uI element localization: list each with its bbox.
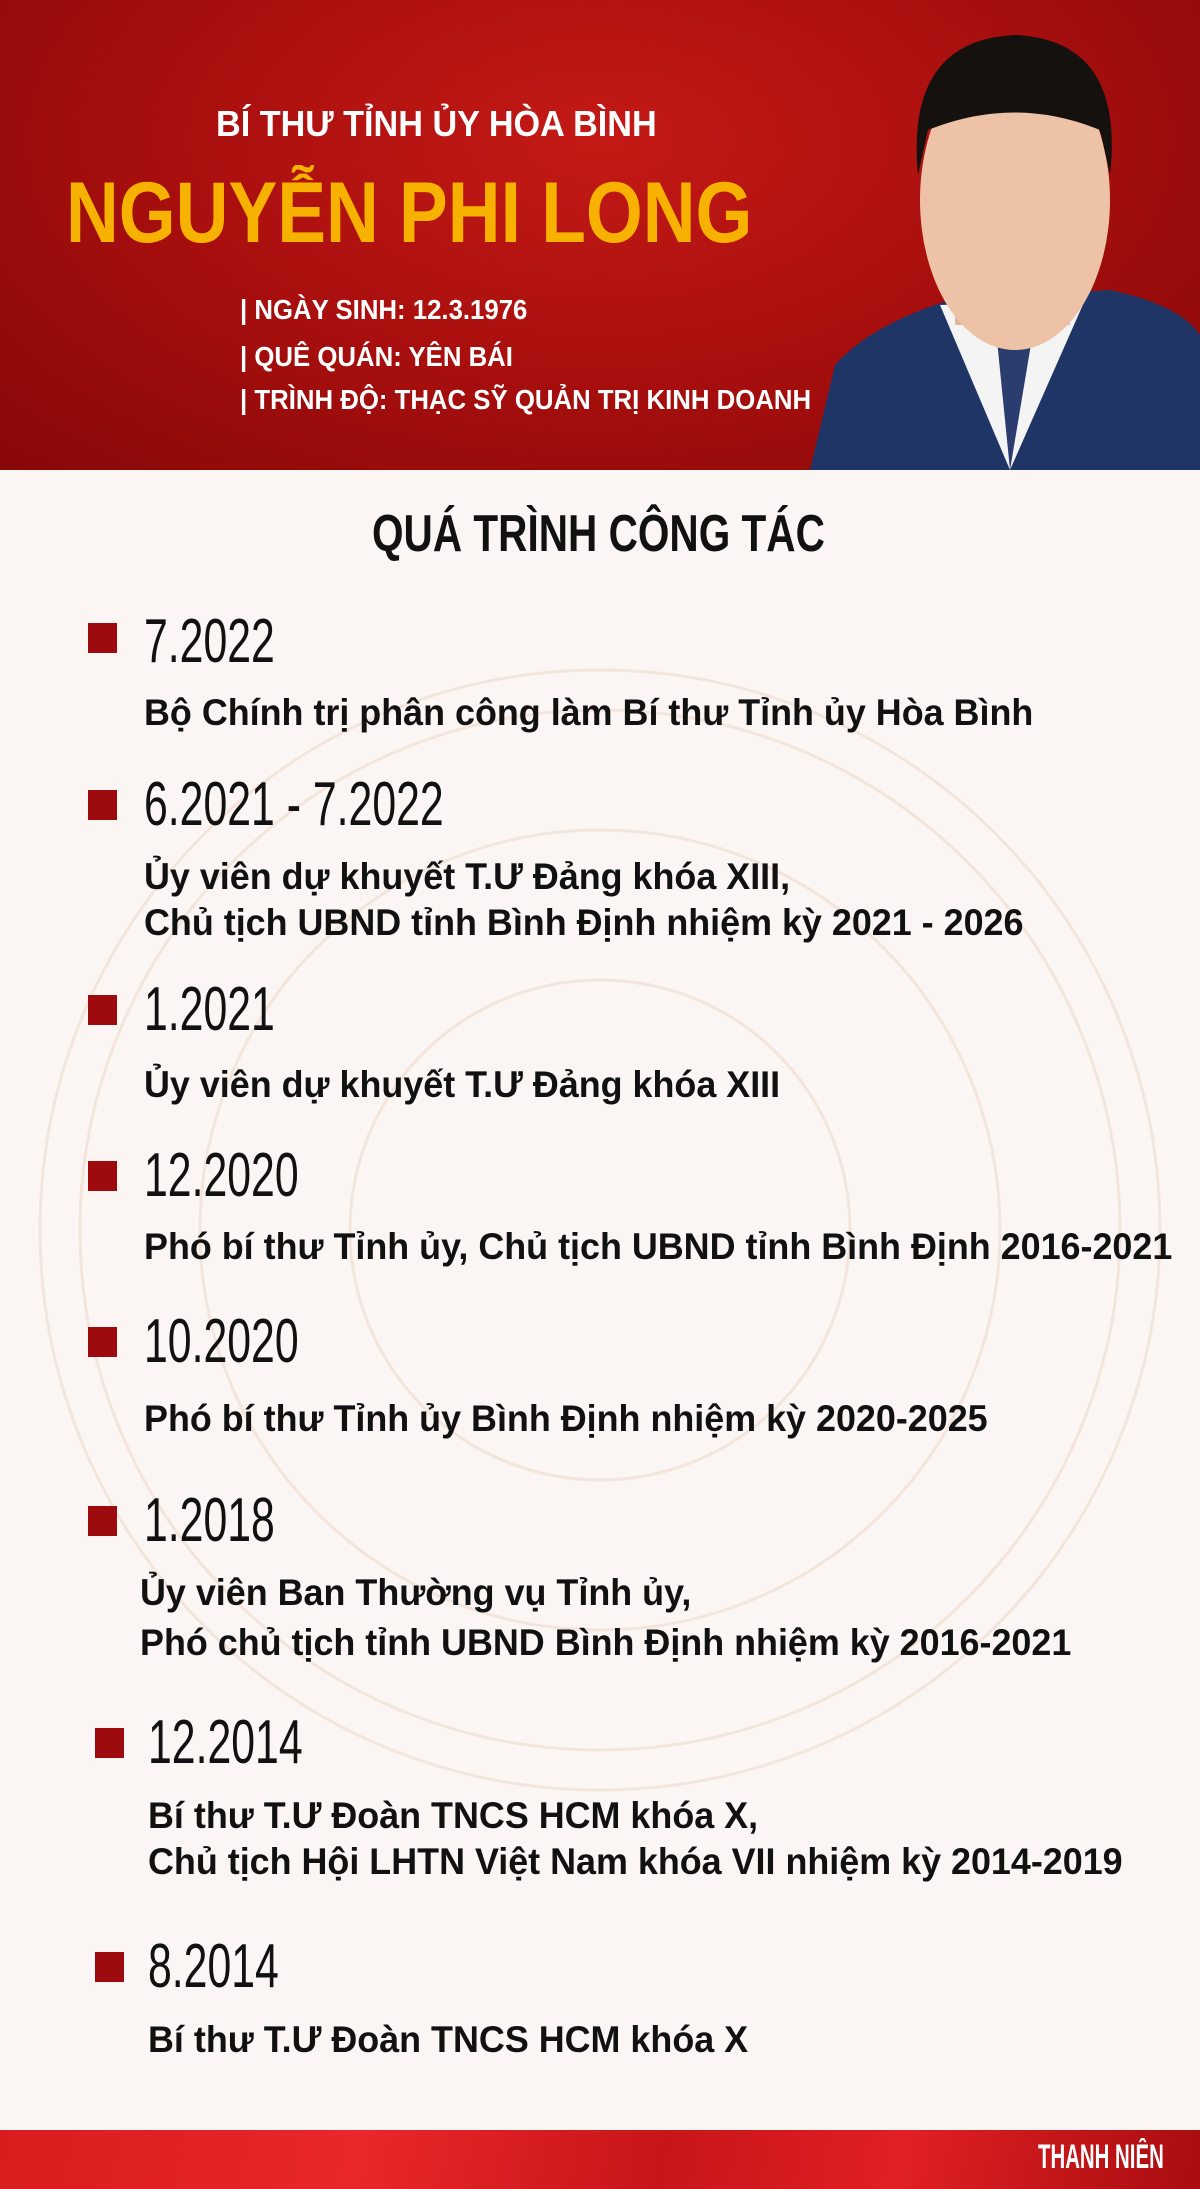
timeline item 8.2014 bbox=[95, 1932, 748, 2060]
timeline item 10.2020: Phó bí thư Tỉnh ủy Bình Định nhiệm kỳ 2020-2025 bbox=[144, 1398, 988, 1439]
timeline item 10.2020: 10.2020 bbox=[144, 1307, 299, 1376]
timeline item 12.2020: Phó bí thư Tỉnh ủy, Chủ tịch UBND tỉnh Bình Định 2016-2021 bbox=[144, 1226, 1172, 1267]
timeline item 1.2018 bbox=[88, 1486, 1071, 1663]
timeline item 8.2014: Bí thư T.Ư Đoàn TNCS HCM khóa X bbox=[148, 2019, 748, 2060]
info: hometown: | QUÊ QUÁN: YÊN BÁI bbox=[240, 341, 513, 372]
info: birth date: | NGÀY SINH: 12.3.1976 bbox=[240, 294, 527, 325]
name title: NGUYỄN PHI LONG bbox=[66, 165, 752, 261]
timeline item 6.2021 - 7.2022: Ủy viên dự khuyết T.Ư Đảng khóa XIII, bbox=[144, 856, 790, 897]
timeline item 1.2021: 1.2021 bbox=[144, 975, 275, 1044]
timeline item 12.2014 bbox=[95, 1708, 1123, 1882]
timeline item 6.2021 - 7.2022: Chủ tịch UBND tỉnh Bình Định nhiệm kỳ 2021 - 2026 bbox=[144, 902, 1023, 943]
footer band bbox=[0, 2130, 1200, 2189]
timeline item 12.2020 bbox=[88, 1141, 1172, 1267]
logo: THANH NIEN: THANH NIÊN bbox=[1038, 2138, 1164, 2176]
timeline item 8.2014: 8.2014 bbox=[148, 1932, 279, 2001]
timeline item 1.2018: Phó chủ tịch tỉnh UBND Bình Định nhiệm kỳ 2016-2021 bbox=[140, 1622, 1071, 1663]
timeline item 6.2021 - 7.2022: 6.2021 - 7.2022 bbox=[144, 770, 444, 839]
timeline item 1.2021 bbox=[88, 975, 780, 1105]
timeline item 10.2020 bbox=[88, 1307, 988, 1439]
timeline item 12.2014: Bí thư T.Ư Đoàn TNCS HCM khóa X, bbox=[148, 1795, 758, 1836]
timeline item 1.2018: Ủy viên Ban Thường vụ Tỉnh ủy, bbox=[140, 1572, 691, 1613]
timeline item 12.2014: 12.2014 bbox=[148, 1708, 303, 1777]
timeline item 12.2014: Chủ tịch Hội LHTN Việt Nam khóa VII nhiệm kỳ 2014-2019 bbox=[148, 1841, 1123, 1882]
background pattern bbox=[38, 668, 1162, 1792]
header banner bbox=[0, 0, 1200, 470]
timeline item 1.2021: Ủy viên dự khuyết T.Ư Đảng khóa XIII bbox=[144, 1064, 780, 1105]
subtitle: BÍ THƯ TỈNH ỦY HÒA BÌNH bbox=[216, 103, 657, 144]
info: education: | TRÌNH ĐỘ: THẠC SỸ QUẢN TRỊ KINH DOANH bbox=[240, 384, 811, 415]
timeline item 12.2020: 12.2020 bbox=[144, 1141, 299, 1210]
timeline item 6.2021 - 7.2022 bbox=[88, 770, 1023, 943]
timeline item 7.2022: Bộ Chính trị phân công làm Bí thư Tỉnh ủy Hòa Bình bbox=[144, 692, 1033, 733]
section heading: QUÁ TRÌNH CÔNG TÁC bbox=[372, 505, 825, 563]
portrait photo bbox=[810, 35, 1200, 470]
timeline item 1.2018: 1.2018 bbox=[144, 1486, 275, 1555]
timeline item 7.2022: 7.2022 bbox=[144, 607, 275, 676]
timeline item 7.2022 bbox=[88, 607, 1033, 733]
